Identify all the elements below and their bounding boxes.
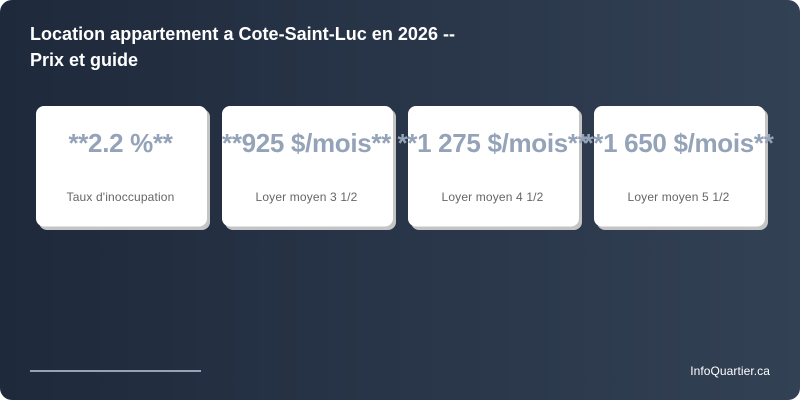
- panel: loyer 5 1/2: [583, 106, 775, 230]
- panel: loyer 3 1/2: Loyer moyen 3 1/2: [256, 190, 358, 204]
- panel: loyer 3 1/2: **925 $/mois**: [222, 128, 392, 158]
- panel: taux d'inoccupation: **2.2 %**: [68, 128, 174, 158]
- panel: loyer 4 1/2: **1 275 $/mois**: [397, 128, 589, 158]
- panel: loyer 5 1/2: **1 650 $/mois**: [583, 128, 775, 158]
- title: Location appartement a Cote-Saint-Luc en 2026 --: [30, 24, 455, 44]
- panel: loyer 3 1/2: [222, 106, 396, 230]
- panel: taux d'inoccupation: Taux d'inoccupation: [67, 190, 174, 204]
- footer brand: InfoQuartier.ca: [690, 364, 770, 378]
- title: [30, 24, 455, 70]
- panel: taux d'inoccupation: [36, 106, 210, 230]
- panel: loyer 4 1/2: [397, 106, 589, 230]
- title: Prix et guide: [30, 50, 138, 70]
- footer line: [30, 370, 201, 372]
- panel: loyer 5 1/2: Loyer moyen 5 1/2: [628, 190, 730, 204]
- panel: loyer 4 1/2: Loyer moyen 4 1/2: [442, 190, 544, 204]
